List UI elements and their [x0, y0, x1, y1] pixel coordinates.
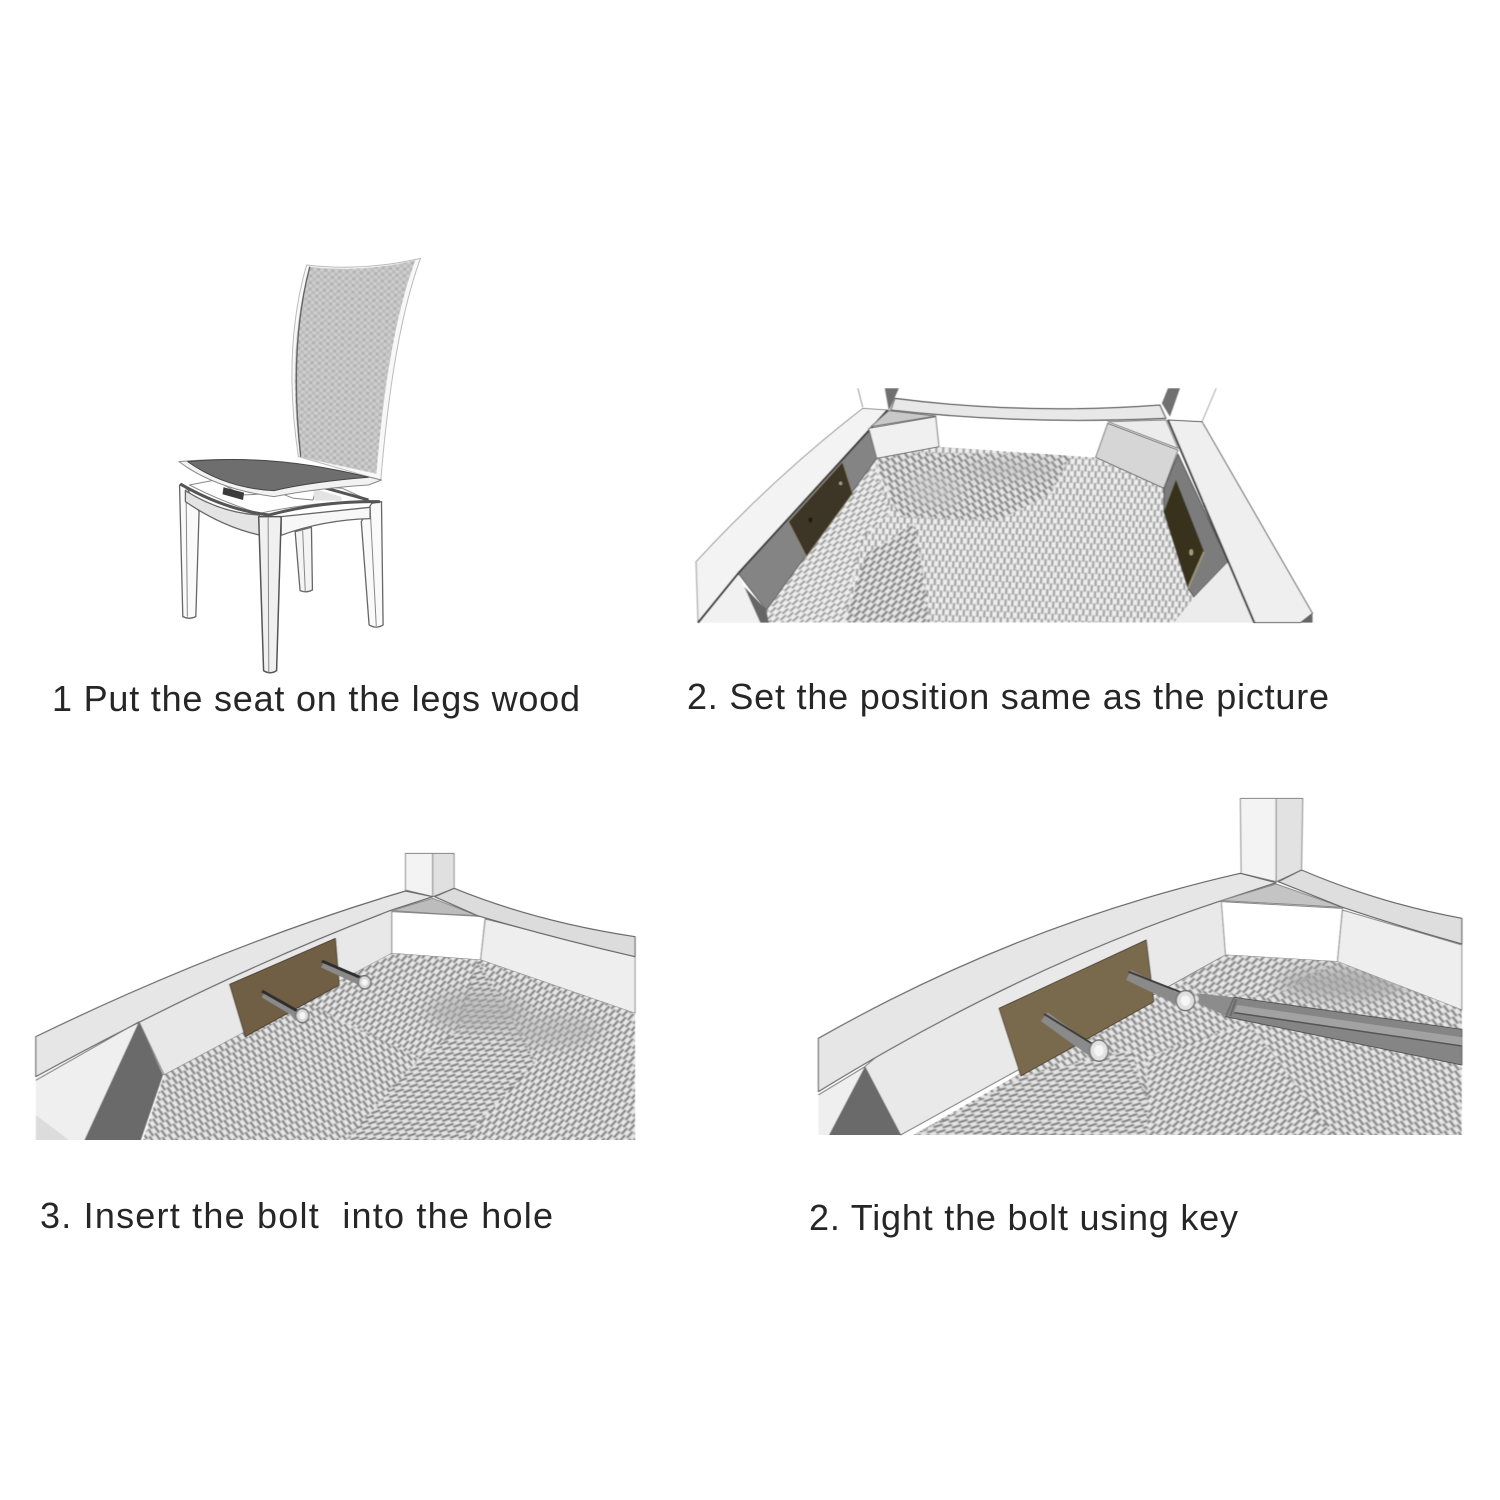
corner wedge: [1221, 884, 1342, 907]
panel: step 4 tighten bolt: [818, 798, 1468, 1140]
left bolt: [1044, 1014, 1108, 1061]
left light post outline: [858, 388, 863, 407]
chair back mesh: [292, 258, 421, 480]
floor webbing: [766, 446, 1194, 623]
right wall: [1337, 910, 1462, 1010]
right corner shadow: [1300, 613, 1312, 623]
caption: step 1: 1 Put the seat on the legs wood: [52, 678, 580, 719]
lower left frame face: [818, 1067, 865, 1135]
floor webbing: [139, 952, 641, 1145]
lower left corner: [36, 1115, 69, 1140]
seat cushion: [179, 459, 381, 497]
panel: step 3 insert bolt: [36, 853, 641, 1145]
right apron: [281, 507, 370, 535]
left apron: [185, 491, 259, 535]
rail lower edge: [818, 1067, 865, 1095]
rail lower edge: [36, 1022, 139, 1080]
right chair leg: [361, 502, 383, 627]
panel: step 2 chair frame from above: [696, 388, 1312, 630]
right rail: [1168, 420, 1312, 623]
left rail inner edge: [698, 410, 888, 623]
left rail: [696, 408, 888, 623]
dark triangular wall: [829, 1067, 901, 1135]
back chair leg: [295, 527, 312, 592]
left dark side wall: [738, 430, 877, 610]
left rail: [818, 873, 1276, 1092]
right bolt: [1129, 972, 1195, 1011]
right rail inner edge: [1168, 420, 1254, 623]
panel: step 1 chair: [179, 258, 421, 673]
left corner wedge: [871, 411, 936, 427]
hex key screwdriver: [1198, 993, 1462, 1065]
left chair leg: [180, 485, 199, 618]
white gap: [1221, 902, 1342, 962]
right dark side wall: [1164, 454, 1228, 597]
corner post: [405, 853, 454, 897]
right wall: [481, 919, 635, 1013]
mounting plate: [999, 940, 1154, 1076]
right corner wedge: [1108, 420, 1178, 448]
left corner block: [869, 417, 939, 458]
lower left frame face: [36, 1022, 139, 1140]
left bolt: [262, 991, 309, 1023]
white gap below top rail: [937, 417, 1106, 457]
right rail: [1278, 870, 1462, 944]
corner post: [1240, 798, 1303, 882]
top rail: [891, 398, 1166, 420]
dark triangular wall: [84, 1022, 163, 1140]
right dark post: [1162, 388, 1180, 417]
right mounting plate: [1164, 480, 1204, 588]
corner wedge: [392, 898, 477, 916]
left dark post: [885, 388, 899, 411]
left wall: [139, 908, 392, 1075]
left wall: [865, 898, 1226, 1135]
lower right rail face: [1174, 562, 1254, 623]
left rail: [36, 891, 433, 1077]
right light post outline: [1202, 388, 1216, 422]
caption: step 2: 2. Set the position same as the picture: [687, 676, 1329, 717]
right bolt: [322, 961, 371, 989]
right rail: [435, 888, 635, 957]
left mounting plate: [788, 462, 853, 557]
seat frame underside: [189, 480, 372, 513]
caption: step 3: 3. Insert the bolt into the hole: [40, 1195, 553, 1236]
right corner block: [1096, 423, 1178, 488]
white gap: [392, 912, 485, 960]
left wall lower corner: [744, 587, 769, 623]
mounting plate: [230, 938, 339, 1037]
floor webbing: [907, 950, 1468, 1140]
front chair leg: [259, 517, 281, 673]
dark apron top rail: [180, 484, 380, 515]
left lower frame face: [698, 573, 760, 623]
caption: step 4: 2. Tight the bolt using key: [809, 1197, 1238, 1238]
